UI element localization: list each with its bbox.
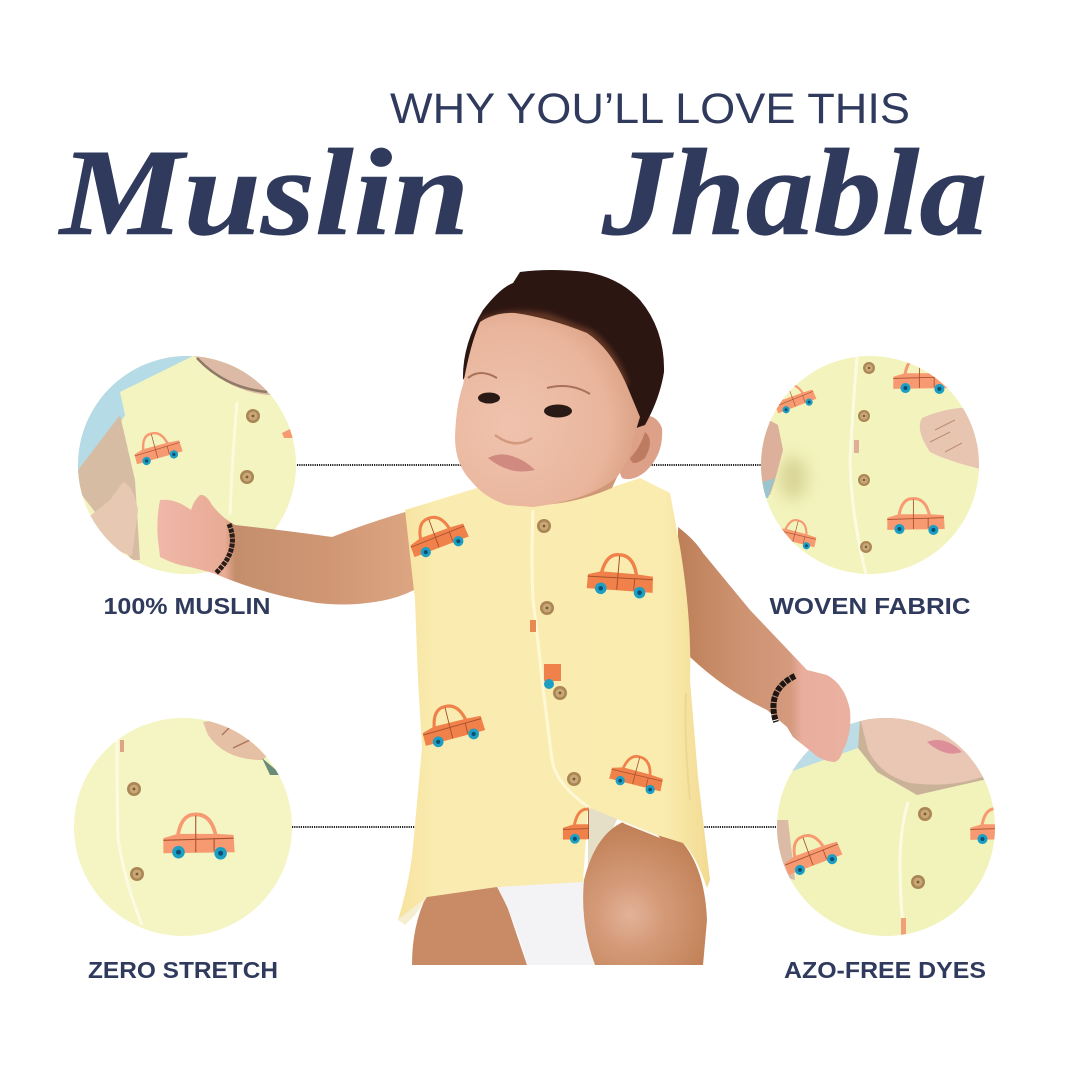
baby: placket line bbox=[532, 510, 590, 808]
baby: lining print bbox=[632, 812, 650, 826]
baby: shirt buttons bbox=[537, 519, 581, 786]
title: Muslin: Muslin bbox=[58, 125, 470, 261]
baby: right leg bbox=[583, 822, 707, 965]
connector: 100% muslin bbox=[297, 464, 462, 466]
label: azo-free dyes: AZO-FREE DYES bbox=[784, 957, 986, 983]
baby: arm and hand, viewer right bbox=[678, 527, 850, 762]
baby: hairline tint bbox=[482, 315, 625, 385]
baby photo bbox=[157, 270, 850, 965]
connector: zero stretch bbox=[292, 826, 416, 828]
baby: panel fold bbox=[686, 693, 690, 800]
baby: hem lining bbox=[398, 897, 427, 925]
baby: shirt bbox=[398, 478, 710, 920]
baby: neck shadow bbox=[530, 475, 618, 505]
circle detail: woven fabric bbox=[760, 356, 985, 574]
connector: azo-free dyes bbox=[700, 826, 777, 828]
circle detail: zero stretch bbox=[74, 716, 292, 936]
baby: brows bbox=[468, 373, 590, 394]
baby: diaper bbox=[497, 878, 597, 965]
baby: left leg bbox=[412, 885, 527, 965]
circle detail: azo-free dyes bbox=[777, 718, 995, 936]
baby: nose bbox=[495, 435, 532, 443]
label: 100% muslin: 100% MUSLIN bbox=[104, 593, 270, 619]
baby: hair bbox=[463, 270, 664, 430]
baby: bracelet left bbox=[216, 524, 232, 573]
baby: arm and hand, viewer left bbox=[157, 495, 414, 604]
baby: bracelet right bbox=[773, 676, 795, 722]
subtitle: why you'll love this: WHY YOU’LL LOVE THIS bbox=[390, 85, 910, 133]
baby: shirt lining bbox=[600, 808, 660, 838]
baby: face bbox=[455, 313, 640, 507]
baby: car prints bbox=[404, 507, 668, 845]
baby: eyes bbox=[478, 392, 500, 404]
label: woven fabric: WOVEN FABRIC bbox=[770, 593, 970, 619]
baby: inner ear bbox=[630, 432, 650, 463]
circle detail: 100% muslin bbox=[78, 356, 300, 574]
title: Jhabla: Jhabla bbox=[601, 124, 987, 262]
label: zero stretch: ZERO STRETCH bbox=[88, 957, 278, 983]
baby: ear bbox=[619, 416, 662, 479]
baby: eye right bbox=[544, 404, 572, 418]
connector: woven fabric bbox=[645, 464, 761, 466]
baby: diaper top bbox=[588, 806, 620, 880]
baby: mouth bbox=[488, 454, 535, 472]
